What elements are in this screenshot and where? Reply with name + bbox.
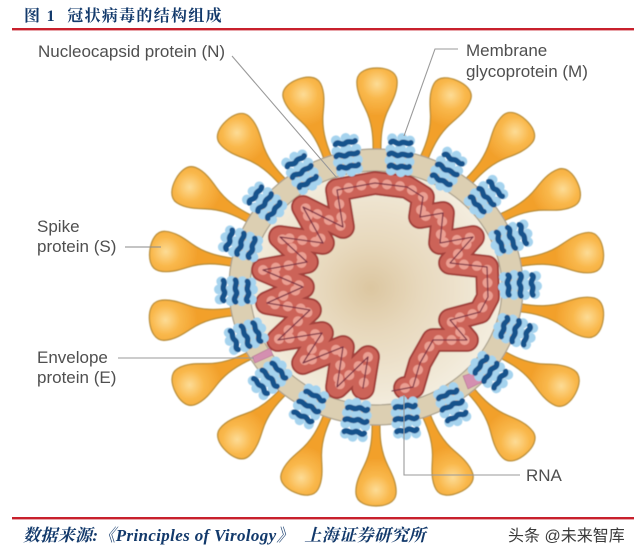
label: RNA: RNA xyxy=(526,466,563,485)
label: membrane glycoprotein: Membrane xyxy=(466,41,547,60)
label: membrane glycoprotein: glycoprotein (M) xyxy=(466,62,588,81)
watermark: 头条 @未来智库 xyxy=(508,527,625,545)
leader line: membrane xyxy=(404,49,458,136)
label: nucleocapsid protein: Nucleocapsid protein (N) xyxy=(38,42,225,61)
label: spike protein: protein (S) xyxy=(37,237,116,256)
label: envelope protein: Envelope xyxy=(37,348,108,367)
leader line: nucleocapsid xyxy=(232,56,337,178)
envelope proteins (E) xyxy=(252,348,482,389)
label: spike protein: Spike xyxy=(37,217,80,236)
viral envelope ring xyxy=(229,149,523,425)
title: 图 1 冠状病毒的结构组成 xyxy=(24,6,223,25)
membrane glycoproteins xyxy=(213,131,542,444)
leader line: envelope xyxy=(118,357,254,359)
viral core xyxy=(250,171,502,405)
source line: 数据来源:《Principles of Virology》 上海证券研究所 xyxy=(23,526,429,545)
leader line: RNA xyxy=(404,395,520,475)
spike proteins xyxy=(147,68,606,506)
top rule xyxy=(12,28,634,30)
label: envelope protein: protein (E) xyxy=(37,368,116,387)
leader line: spike xyxy=(125,246,161,248)
nucleocapsid protein chain xyxy=(263,183,488,391)
bottom rule xyxy=(12,517,634,519)
diagram: coronavirus particle xyxy=(147,68,606,506)
